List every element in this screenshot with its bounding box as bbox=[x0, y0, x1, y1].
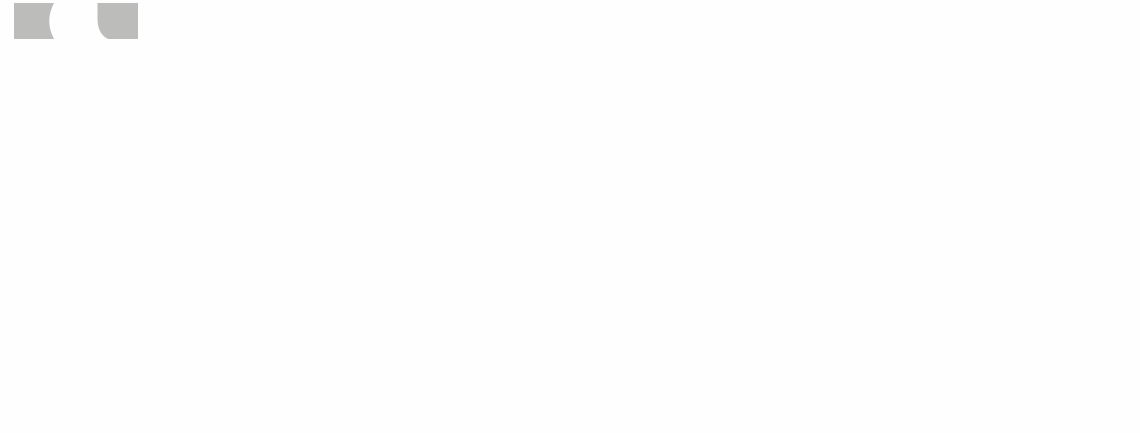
shape: right grey block with rounded bottom-left corner bbox=[98, 3, 138, 39]
shape: left grey block with concave right edge bbox=[14, 3, 54, 39]
